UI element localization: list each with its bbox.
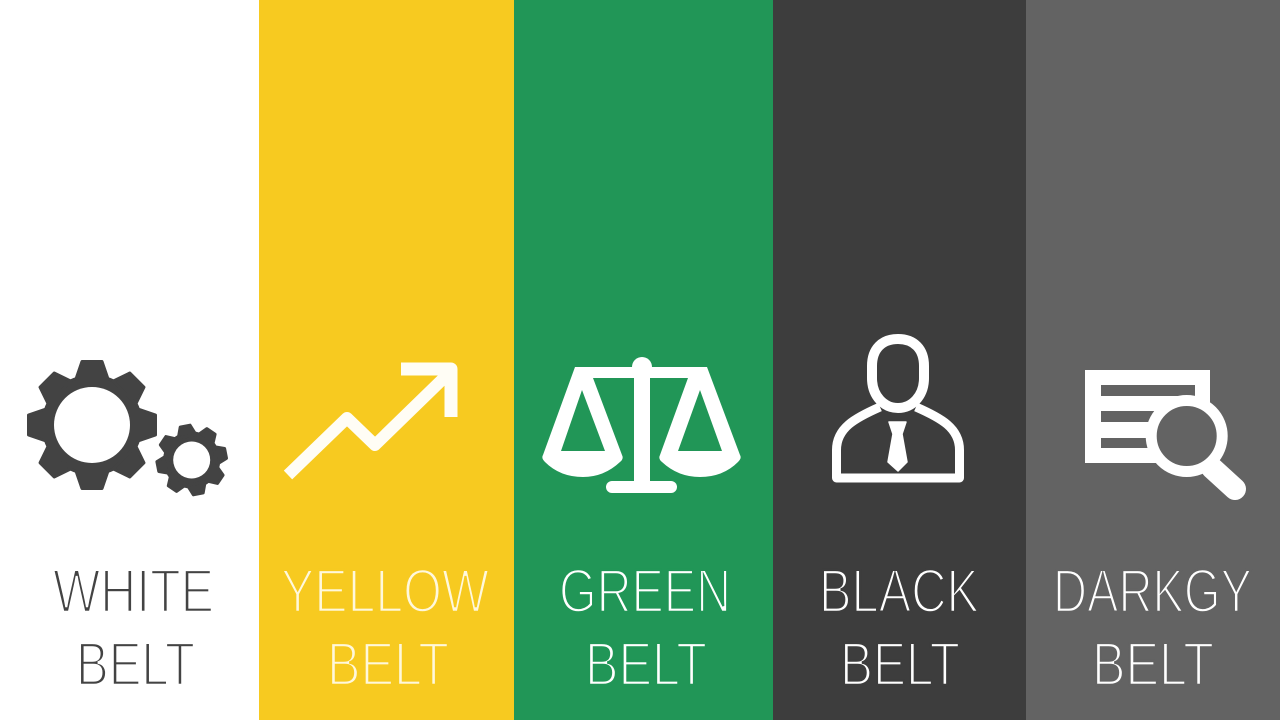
label: black belt: BELT xyxy=(840,630,960,698)
label: green belt: BELT xyxy=(585,630,707,698)
label: black belt xyxy=(819,557,979,698)
panel: white belt xyxy=(0,0,259,720)
label: black belt: BLACK xyxy=(819,557,979,625)
panel: yellow belt xyxy=(259,0,514,720)
icon: rising arrow xyxy=(288,369,451,475)
label: dark grey belt: BELT xyxy=(1092,630,1214,698)
panel: dark grey belt xyxy=(1026,0,1280,720)
label: green belt: GREEN xyxy=(559,557,731,625)
label: green belt xyxy=(559,557,731,698)
label: yellow belt: BELT xyxy=(327,630,449,698)
icon: balance scale xyxy=(542,357,741,493)
label: yellow belt xyxy=(281,557,489,698)
icon: document with magnifier xyxy=(1085,370,1235,489)
icon: person with tie xyxy=(836,339,960,478)
label: white belt: BELT xyxy=(76,630,195,698)
panel: green belt xyxy=(514,0,773,720)
label: white belt xyxy=(53,557,214,698)
panel: black belt xyxy=(773,0,1026,720)
label: dark grey belt xyxy=(1053,557,1252,698)
label: yellow belt: YELLOW xyxy=(281,557,489,625)
label: white belt: WHITE xyxy=(53,557,214,625)
icon: gears xyxy=(28,362,232,500)
